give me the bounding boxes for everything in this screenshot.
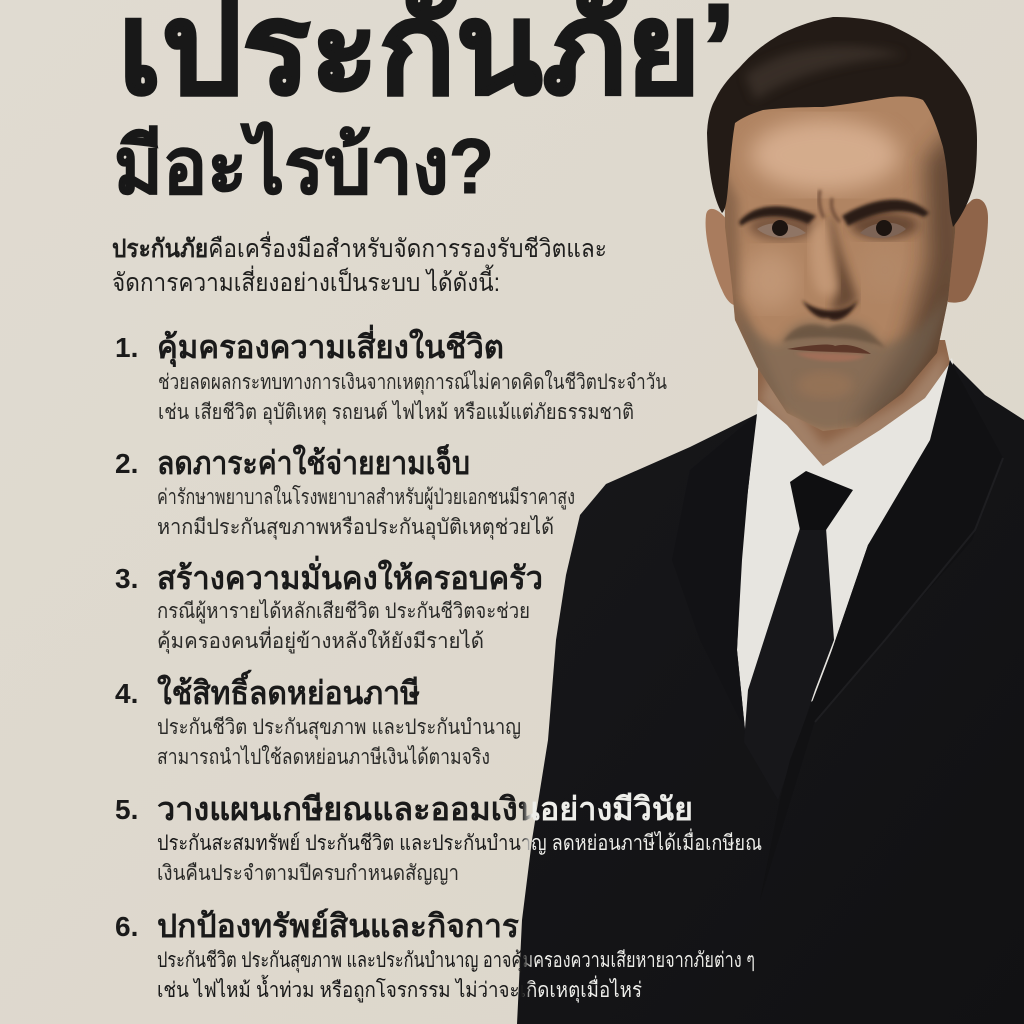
title line 2: มีอะไรบ้าง? [114,121,494,210]
side shadow [850,128,956,428]
item 2: 2. [115,448,138,479]
item 6: ประกันชีวิต ประกันสุขภาพ และประกันบำนาญ อาจคุ้มครองความเสียหายจากภัยต่าง ๆ [157,949,755,973]
item 5: เงินคืนประจำตามปีครบกำหนดสัญญา [157,862,459,885]
item 4: 4. [115,678,138,709]
eyebrows [739,206,816,226]
neck [758,340,950,466]
forehead highlight [750,119,900,191]
item 5: ประกันสะสมทรัพย์ ประกันชีวิต และประกันบำนาญ ลดหย่อนภาษีได้เมื่อเกษียณ [157,828,762,855]
nose shadow [828,215,858,312]
item 3 [115,555,543,654]
tie [744,471,853,800]
item 5: วางแผนเกษียณและออมเงินอย่างมีวินัย [157,791,693,827]
left eye [757,220,806,238]
item 1: คุ้มครองความเสี่ยงในชีวิต [157,324,504,368]
item 5: 5. [115,794,138,825]
hair [707,17,977,227]
item 5 [115,791,762,885]
eye sockets [748,212,816,240]
mouth [787,345,871,354]
intro paragraph: ประกันภัยคือเครื่องมือสำหรับจัดการรองรับชีวิตและ [112,231,607,263]
white shirt [737,358,953,730]
item 1: เช่น เสียชีวิต อุบัติเหตุ รถยนต์ ไฟไหม้ หรือแม้แต่ภัยธรรมชาติ [158,400,634,425]
title [114,0,736,210]
item 1 [115,324,667,425]
item 4 [115,669,521,769]
stubble [740,308,943,431]
jacket lapels [760,360,1003,900]
right eye [860,220,906,238]
cheek highlights [742,250,798,310]
item 2 [115,443,575,540]
nose highlight [810,222,838,295]
item 4: สามารถนำไปใช้ลดหย่อนภาษีเงินได้ตามจริง [157,745,490,769]
item 3: คุ้มครองคนที่อยู่ข้างหลังให้ยังมีรายได้ [157,626,484,654]
face [724,96,956,431]
item 1: ช่วยลดผลกระทบทางการเงินจากเหตุการณ์ไม่คาดคิดในชีวิตประจำวัน [158,370,667,395]
item 6: 6. [115,911,138,942]
item 6: เช่น ไฟไหม้ น้ำท่วม หรือถูกโจรกรรม ไม่ว่าจะเกิดเหตุเมื่อไหร่ [157,975,642,1003]
item 6: ปกป้องทรัพย์สินและกิจการ [157,908,519,944]
intro paragraph [112,231,607,297]
item 1: 1. [115,332,138,363]
right ear [948,199,988,303]
left ear [706,209,736,305]
item 2: หากมีประกันสุขภาพหรือประกันอุบัติเหตุช่วยได้ [157,515,554,540]
item 2: ลดภาระค่าใช้จ่ายยามเจ็บ [157,443,470,481]
nostril shadow [802,300,858,320]
portrait: man in black suit [517,17,1024,1024]
item 3: กรณีผู้หารายได้หลักเสียชีวิต ประกันชีวิตจะช่วย [157,599,530,624]
item 6 [115,908,755,1003]
item 3: 3. [115,563,138,594]
moustache [783,324,885,348]
chin [802,373,850,396]
suit jacket [517,360,1024,1024]
brow crease [819,190,840,222]
item 3: สร้างความมั่นคงให้ครอบครัว [157,555,543,596]
lapel edge [815,458,1003,722]
hair highlight [745,46,905,100]
item 4: ประกันชีวิต ประกันสุขภาพ และประกันบำนาญ [157,716,521,740]
intro paragraph: จัดการความเสี่ยงอย่างเป็นระบบ ได้ดังนี้: [112,264,500,297]
item 2: ค่ารักษาพยาบาลในโรงพยาบาลสำหรับผู้ป่วยเอกชนมีราคาสูง [157,485,575,510]
item 4: ใช้สิทธิ์ลดหย่อนภาษี [157,669,420,711]
